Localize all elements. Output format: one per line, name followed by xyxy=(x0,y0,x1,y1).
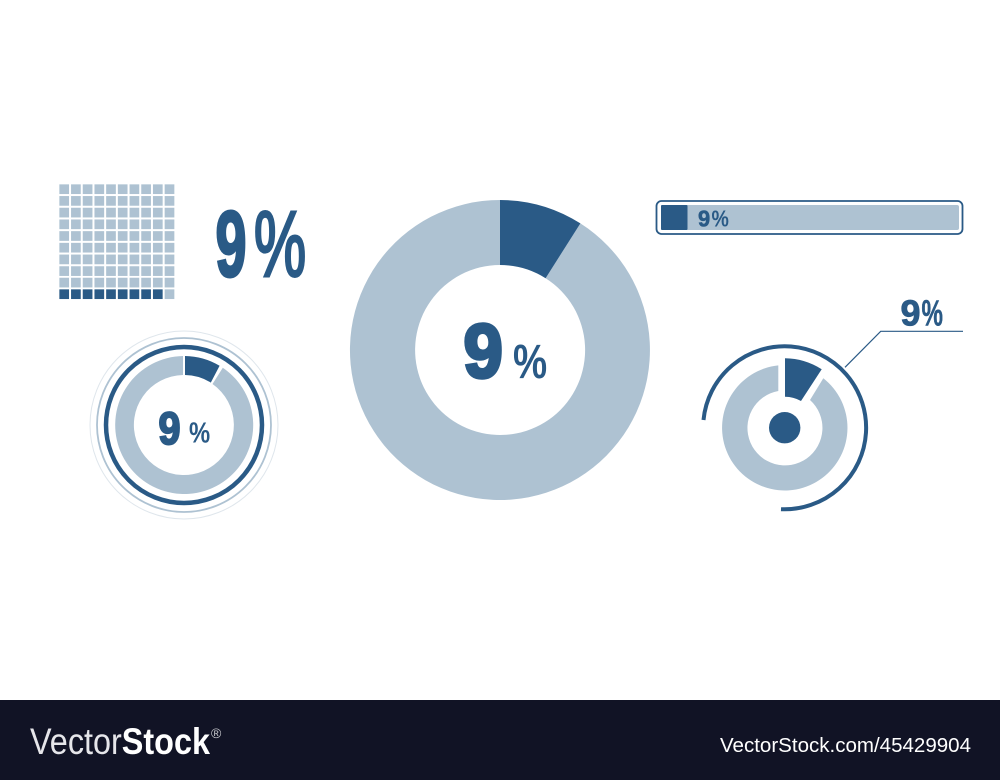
callout leader line xyxy=(845,331,963,367)
bar value label xyxy=(698,206,729,232)
ring donut remainder xyxy=(115,356,253,494)
donut 9 percent segment xyxy=(500,200,580,278)
footer image id: VectorStock.com/45429904 xyxy=(720,735,971,757)
panel: callout donut chart xyxy=(704,292,963,509)
bar value label: % xyxy=(712,206,729,232)
callout center dot xyxy=(769,412,800,443)
bar frame xyxy=(656,201,962,234)
outer arc xyxy=(704,346,866,509)
waffle value label xyxy=(216,193,306,297)
callout donut remainder xyxy=(722,365,847,490)
footer registered mark: ® xyxy=(211,725,222,741)
bar track xyxy=(661,205,959,230)
waffle value label: 9 xyxy=(216,194,247,297)
ring donut value label: % xyxy=(189,416,210,449)
footer banner xyxy=(0,700,1000,780)
bar fill xyxy=(661,205,688,230)
outer faint ring xyxy=(90,331,278,519)
bar value label: 9 xyxy=(698,206,710,232)
callout value label xyxy=(900,292,943,334)
panel: progress bar xyxy=(656,201,962,234)
dark ring xyxy=(106,347,262,503)
ring donut segment xyxy=(185,356,220,383)
light ring xyxy=(97,338,271,512)
panel: waffle chart with 9 percent xyxy=(59,184,306,299)
callout donut exploded segment xyxy=(785,358,822,401)
donut remainder xyxy=(350,200,650,500)
waffle grid xyxy=(59,184,175,299)
callout value label: % xyxy=(922,294,943,334)
panel: main donut chart xyxy=(350,200,650,500)
callout value label: 9 xyxy=(900,292,921,334)
ring donut value label xyxy=(158,404,210,454)
waffle value label: % xyxy=(254,193,306,296)
donut value label: % xyxy=(513,336,547,389)
footer logo: VectorStock xyxy=(30,721,210,762)
donut value label xyxy=(464,309,547,394)
ring donut value label: 9 xyxy=(158,404,181,454)
donut value label: 9 xyxy=(464,309,503,394)
panel: ringed donut chart xyxy=(90,331,278,519)
